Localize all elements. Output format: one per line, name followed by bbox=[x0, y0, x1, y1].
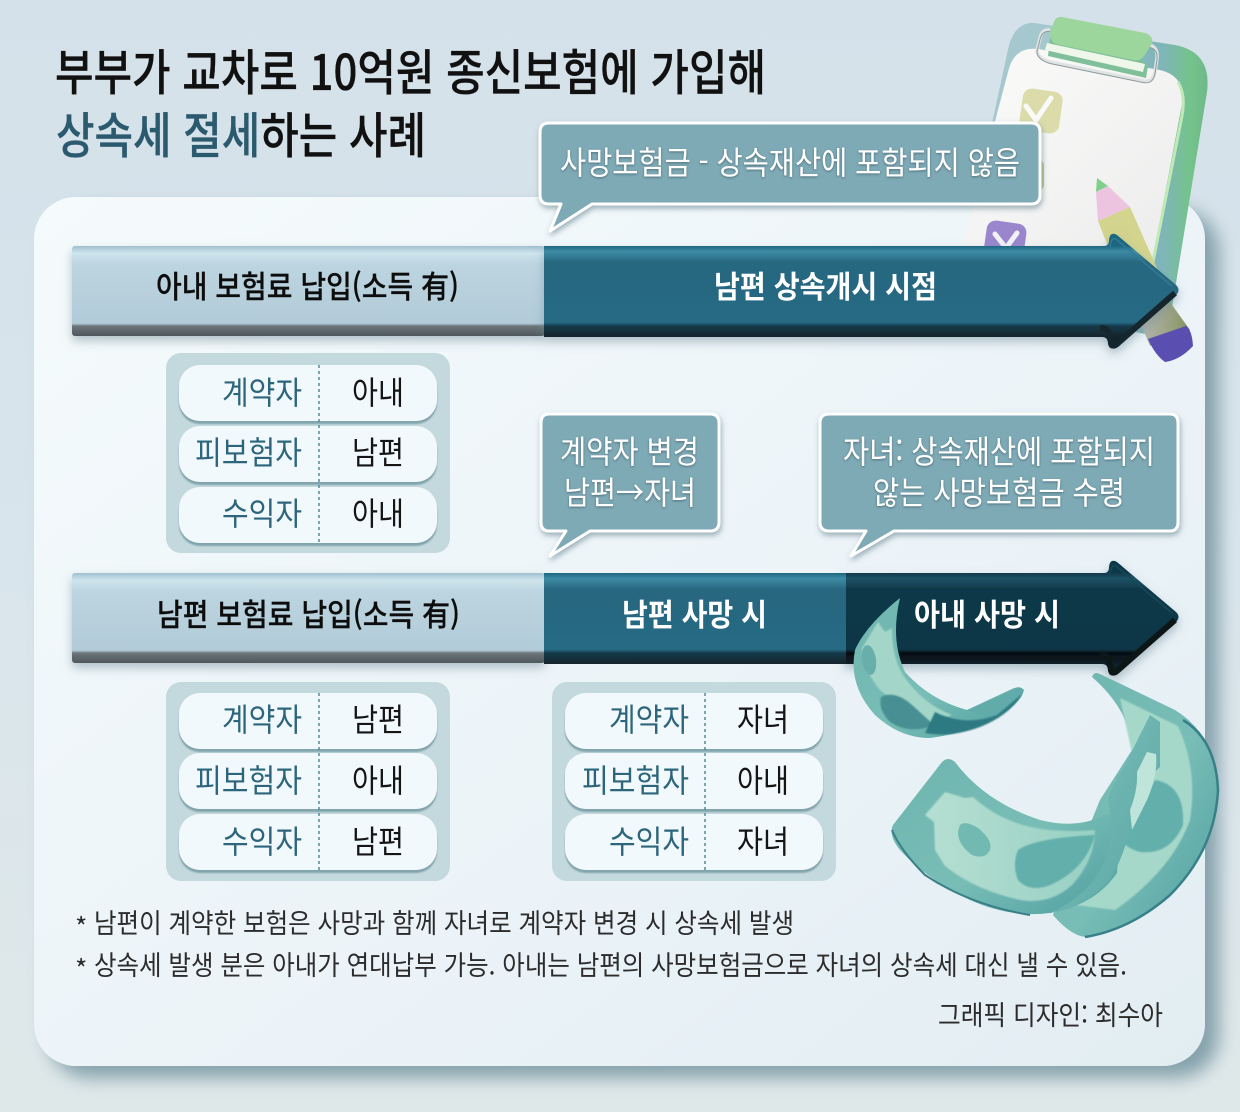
row: beneficiary: 수익자 bbox=[222, 817, 302, 863]
table: child contract bbox=[552, 682, 836, 881]
footnotes: 남편이 계약한 보험은 사망과 함께 자녀로 계약자 변경 시 상속세 발생 bbox=[94, 902, 794, 941]
row: insured: 피보험자 bbox=[582, 756, 689, 802]
callout: children receive bbox=[820, 414, 1178, 556]
row: contractor: 계약자 bbox=[222, 368, 302, 414]
front note bbox=[892, 759, 1120, 914]
row: beneficiary: 아내 bbox=[352, 489, 404, 535]
row: contractor bbox=[179, 693, 437, 749]
callout: contractor change: 계약자 변경 bbox=[560, 427, 699, 473]
credit: 그래픽 디자인: 최수아 bbox=[938, 994, 1163, 1033]
row: contractor: 남편 bbox=[352, 695, 404, 741]
row: insured: 아내 bbox=[737, 756, 789, 802]
arrow: on wife death bbox=[844, 561, 1178, 676]
callout: death benefit not included bbox=[540, 123, 1040, 231]
row: contractor: 자녀 bbox=[737, 695, 789, 741]
row: insured bbox=[179, 426, 437, 482]
icon: clipboard bbox=[958, 17, 1208, 335]
icon: small money note bbox=[854, 598, 1024, 738]
icon: pencil bbox=[1096, 178, 1193, 362]
row: contractor: 아내 bbox=[352, 368, 404, 414]
table: husband contract bbox=[166, 682, 450, 881]
footnotes bbox=[75, 902, 1127, 987]
callout: death benefit not included: 사망보험금 - 상속재산에 포함되지 않음 bbox=[560, 138, 1020, 184]
row: beneficiary bbox=[179, 814, 437, 870]
title: 부부가 교차로 10억원 종신보험에 가입해 bbox=[55, 34, 766, 105]
row: insured: 남편 bbox=[352, 428, 404, 474]
icon: clip ring bbox=[1037, 30, 1157, 83]
title bbox=[55, 34, 766, 168]
row: contractor: 계약자 bbox=[222, 695, 302, 741]
bar: wife pays premium: 아내 보험료 납입(소득 有) bbox=[156, 262, 459, 307]
row: contractor bbox=[565, 693, 823, 749]
callout: children receive: 자녀: 상속재산에 포함되지 bbox=[843, 427, 1155, 473]
icon: large money note bbox=[892, 673, 1218, 937]
bar: wife pays premium bbox=[72, 246, 545, 336]
footnotes: * bbox=[75, 906, 87, 945]
callout: contractor change bbox=[541, 414, 719, 556]
bar: on husband death bbox=[544, 573, 846, 664]
main panel bbox=[34, 197, 1205, 1066]
row: insured bbox=[179, 753, 437, 809]
bar: husband pays premium bbox=[72, 573, 545, 663]
row: insured: 피보험자 bbox=[195, 756, 302, 802]
row: beneficiary bbox=[179, 487, 437, 543]
icon: yellow check bbox=[1018, 87, 1064, 135]
row: insured bbox=[565, 753, 823, 809]
icon: second check box bbox=[1030, 160, 1044, 190]
footnotes: * bbox=[75, 948, 87, 987]
callout: children receive: 않는 사망보험금 수령 bbox=[873, 468, 1125, 514]
icon: green clip bbox=[1050, 17, 1152, 60]
row: beneficiary: 수익자 bbox=[222, 489, 302, 535]
table: wife contract bbox=[166, 353, 450, 553]
row: insured: 피보험자 bbox=[195, 428, 302, 474]
row: beneficiary: 수익자 bbox=[609, 817, 689, 863]
callout: contractor change: 남편→자녀 bbox=[564, 468, 696, 514]
row: beneficiary: 자녀 bbox=[737, 817, 789, 863]
row: beneficiary: 남편 bbox=[352, 817, 404, 863]
title: 상속세 절세하는 사례 bbox=[56, 97, 426, 168]
icon: purple check bbox=[982, 219, 1028, 265]
row: beneficiary bbox=[565, 814, 823, 870]
row: contractor: 계약자 bbox=[609, 695, 689, 741]
bar: husband pays premium: 남편 보험료 납입(소득 有) bbox=[157, 590, 460, 635]
arrow: husband inheritance start bbox=[544, 234, 1178, 349]
bar: on husband death: 남편 사망 시 bbox=[622, 590, 767, 635]
arrow: husband inheritance start: 남편 상속개시 시점 bbox=[714, 262, 937, 307]
row: contractor bbox=[179, 365, 437, 421]
footnotes: 상속세 발생 분은 아내가 연대납부 가능. 아내는 남편의 사망보험금으로 자녀의 상속세 대신 낼 수 있음. bbox=[94, 944, 1127, 983]
fold bbox=[1050, 715, 1160, 913]
back note bbox=[1053, 673, 1218, 937]
arrow: on wife death: 아내 사망 시 bbox=[914, 590, 1060, 635]
row: insured: 아내 bbox=[352, 756, 404, 802]
